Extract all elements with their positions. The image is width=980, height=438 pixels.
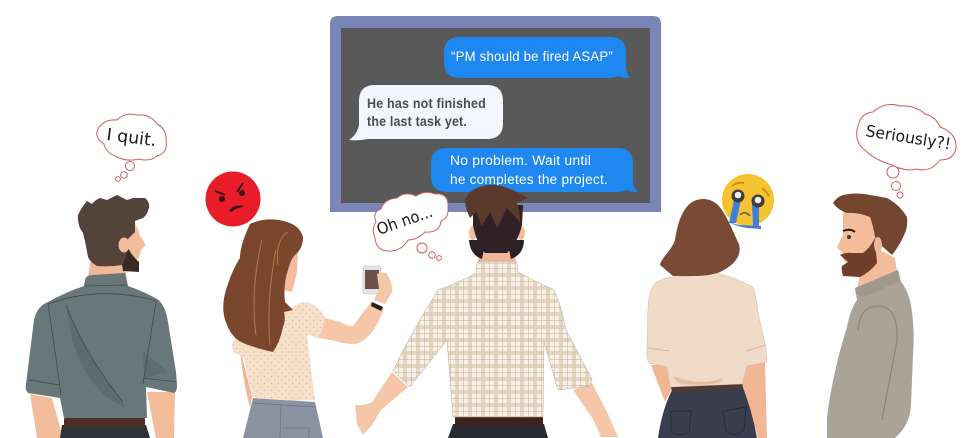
cloud — [857, 104, 956, 170]
tears — [729, 200, 759, 226]
hand — [374, 273, 392, 304]
icon: crying emoji — [722, 174, 774, 229]
hair — [78, 195, 149, 266]
panel: chat screen — [330, 16, 661, 212]
cloud — [373, 192, 448, 251]
hair strands — [254, 232, 288, 345]
text: Seriously?! — [864, 121, 952, 153]
person: man in plaid shirt — [355, 185, 618, 438]
arms — [651, 362, 767, 438]
beard — [122, 248, 139, 272]
screen background — [341, 28, 650, 203]
chat bubble: PM should be fired — [444, 37, 630, 78]
beard — [840, 238, 877, 277]
brows — [215, 183, 243, 195]
thought bubble: Seriously — [857, 104, 956, 198]
small bubbles — [417, 243, 441, 260]
hair back of head — [473, 205, 523, 253]
phone — [363, 266, 381, 294]
hair — [833, 194, 907, 255]
neck — [857, 250, 897, 292]
ears — [469, 226, 477, 240]
chat bubble: no problem — [431, 148, 638, 192]
jeans — [243, 398, 323, 438]
eyes — [219, 196, 225, 202]
left arm — [241, 352, 252, 408]
raised arm — [314, 302, 384, 344]
pockets — [671, 407, 746, 435]
chat bubble: PM should be fired: “PM should be fired ASAP” — [451, 49, 613, 64]
cuffs — [648, 345, 766, 351]
tear puddle — [722, 218, 761, 229]
ear — [118, 238, 130, 252]
trousers — [448, 424, 548, 438]
blouse — [232, 302, 325, 401]
chat bubble: not finished — [349, 85, 503, 140]
shirt folds — [29, 285, 177, 402]
person: woman in beige blouse — [647, 199, 767, 438]
thought bubble: I quit — [97, 114, 166, 181]
shirt — [26, 273, 177, 418]
neck — [88, 262, 127, 280]
trousers — [658, 385, 757, 438]
chat bubble: no problem: No problem. Wait until — [450, 153, 591, 168]
small bubbles — [887, 166, 903, 198]
person: woman with long hair holding phone — [223, 219, 392, 438]
person: man in grey-green shirt — [26, 195, 177, 438]
plaid shirt — [393, 261, 592, 417]
text: I quit. — [105, 125, 157, 151]
eye and brow — [843, 230, 855, 232]
belt — [455, 417, 543, 425]
blouse — [647, 273, 767, 387]
face — [120, 220, 145, 262]
belt — [671, 382, 743, 393]
shirt shading — [66, 305, 168, 407]
chat bubble: no problem: he completes the project. — [450, 172, 608, 187]
brows and mouth — [732, 183, 769, 196]
neck — [477, 240, 517, 266]
arms — [355, 372, 618, 437]
chat bubble: not finished: He has not finished — [367, 96, 486, 111]
watch — [371, 302, 383, 311]
cloud — [97, 114, 166, 160]
shirt folds — [858, 306, 897, 420]
hair — [660, 199, 740, 276]
beard sides — [469, 240, 524, 259]
long hair — [223, 219, 303, 352]
mouth — [229, 206, 244, 212]
chat bubble: not finished: the last task yet. — [367, 114, 467, 129]
icon: angry emoji — [206, 172, 260, 226]
arms — [30, 392, 175, 438]
text: Oh no... — [374, 202, 435, 239]
blouse shading — [673, 376, 723, 385]
shirt — [827, 270, 914, 438]
face — [283, 240, 298, 292]
trousers — [60, 425, 150, 438]
thought bubble: Oh no — [373, 192, 448, 260]
face — [837, 210, 880, 265]
hair top — [465, 185, 528, 228]
belt — [64, 418, 145, 427]
screen frame — [330, 16, 661, 212]
ear — [874, 237, 882, 253]
collar — [855, 270, 900, 297]
small bubbles — [116, 162, 134, 181]
jeans details — [253, 403, 316, 438]
person: bearded man looking left — [827, 194, 914, 438]
eyes — [732, 190, 744, 202]
